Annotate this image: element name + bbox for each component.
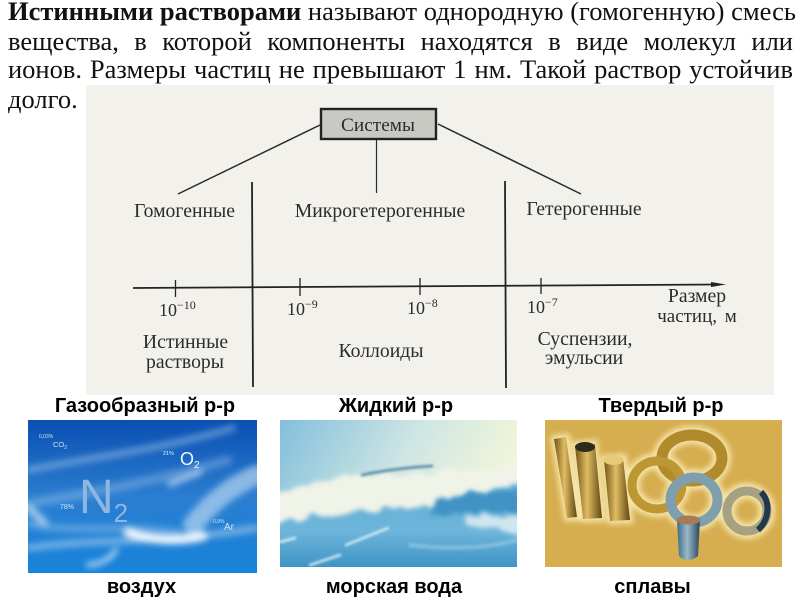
size axis with arrow and ticks [133,278,726,297]
clouds [28,428,257,565]
class headings: Гетерогенные [526,198,642,220]
caption: air: воздух [107,576,176,598]
gas labels: 2 [64,445,67,451]
axis title: частиц, м [657,306,737,327]
axis title: Размер [668,285,726,307]
axis tick labels: −7 [545,295,558,309]
axis title [657,285,737,327]
caption: gaseous: Газообразный р-р [55,395,235,417]
class headings: Гомогенные [134,200,235,222]
tubes [554,437,630,521]
gas labels: O [180,449,194,469]
caption: alloys: сплавы [614,576,691,598]
axis tick labels [159,295,558,320]
axis tick labels: −9 [305,297,318,311]
water body [280,478,517,567]
wave details [280,466,517,565]
diagram: classification of systems by particle size [86,85,774,395]
particle type labels: Коллоиды [338,340,424,362]
gas labels: 2 [114,498,128,528]
particle type labels: эмульсии [545,347,624,369]
vertical dividers [252,181,506,388]
steel rod [676,516,700,560]
image: sea wave [280,420,517,567]
gas labels: 0,03% [39,434,54,440]
box: Системы [321,109,436,139]
axis tick labels: 10 [407,298,425,318]
gas labels: 0,9% [213,519,225,525]
gas labels: 21% [163,451,174,457]
gas labels: N [79,471,114,524]
image: air composition on blue sky [28,420,257,573]
intro text block [8,0,796,114]
gas labels [39,434,235,533]
glow [551,434,767,531]
class headings: Микрогетерогенные [295,200,465,222]
intro text block: ионов. Размеры частиц не превышают 1 нм. Такой раствор устойчив [8,54,793,84]
blue band in the wave [430,490,520,516]
connector lines from the root box [178,124,581,194]
gas labels: CO [53,440,64,449]
axis tick labels: 10 [159,300,177,320]
gas labels: 2 [194,460,200,471]
caption: liquid: Жидкий р-р [339,395,453,417]
axis tick labels: 10 [287,299,305,319]
rings [632,435,767,531]
gas labels: 78% [60,504,74,511]
particle type labels: Суспензии, [538,328,632,350]
particle type labels: Истинные [143,331,228,353]
image: metal alloy tubes and rings [545,420,782,567]
axis tick labels: 10 [527,297,545,317]
class headings [134,198,642,222]
intro text block: вещества, в которой компоненты находятся в виде молекул или [8,26,793,56]
axis tick labels: −10 [177,298,196,312]
axis tick labels: −8 [425,296,438,310]
gas labels: Ar [224,522,235,533]
foam crest [272,466,525,524]
lower right spray [465,514,525,536]
particle type labels [143,328,632,373]
box: Системы: Системы [341,115,415,136]
caption: solid: Твердый р-р [598,395,724,417]
particle type labels: растворы [146,351,224,373]
caption: sea water: морская вода [326,576,462,598]
intro text block: долго. [8,84,78,114]
